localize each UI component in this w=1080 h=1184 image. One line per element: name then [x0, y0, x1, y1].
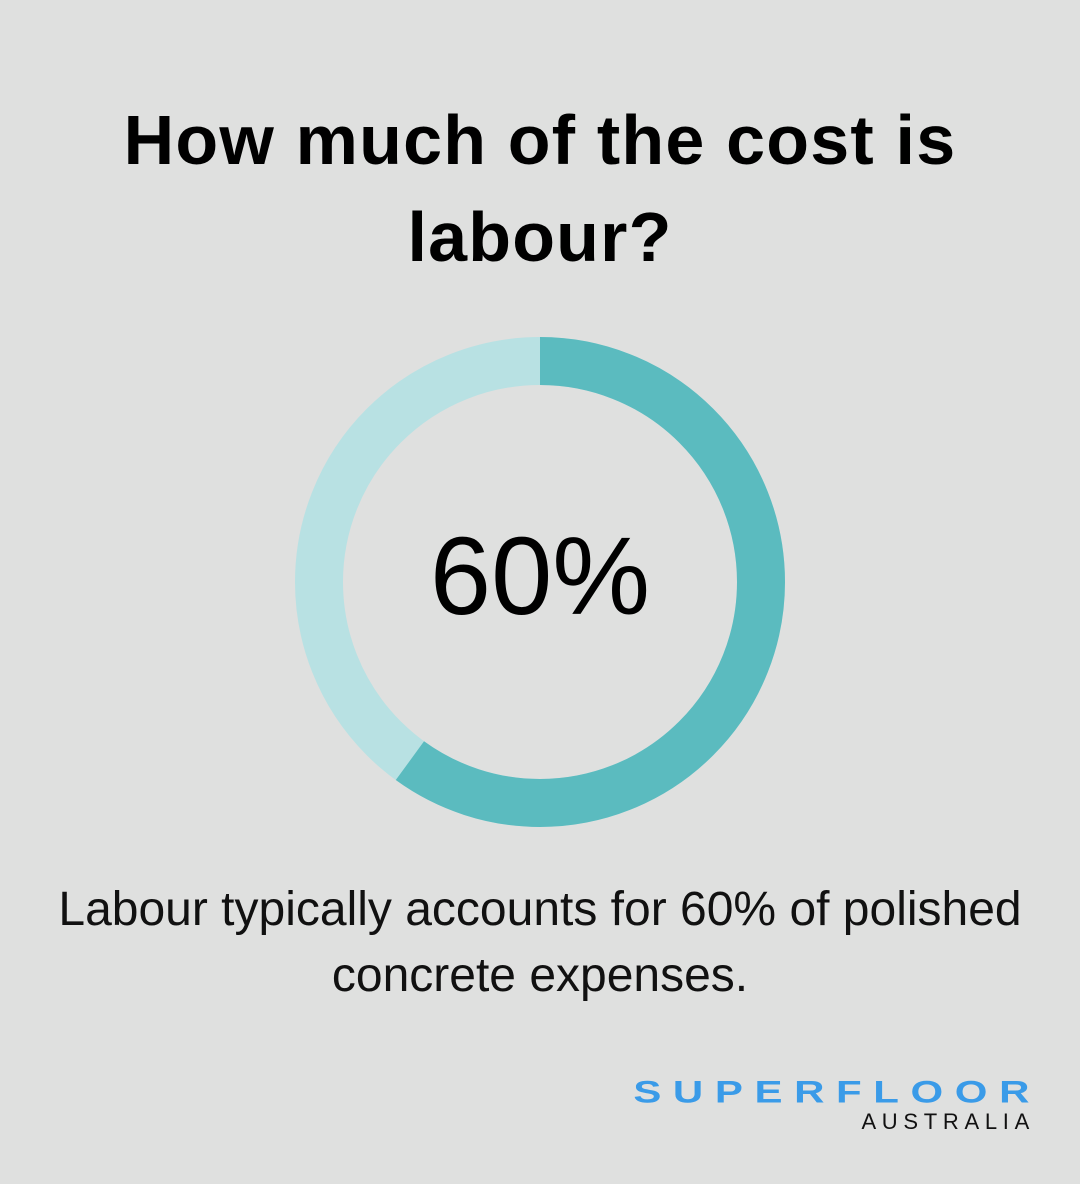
logo: AUSTRALIA [861, 1109, 1035, 1134]
description [58, 883, 1022, 1002]
title: labour? [407, 198, 673, 276]
title: How much of the cost is [124, 101, 956, 179]
description: Labour typically accounts for 60% of polished [58, 883, 1022, 936]
description: concrete expenses. [332, 949, 748, 1002]
title [124, 101, 956, 276]
logo [633, 1074, 1041, 1134]
logo: SUPERFLOOR [633, 1074, 1041, 1109]
center value: 60% [430, 515, 650, 638]
